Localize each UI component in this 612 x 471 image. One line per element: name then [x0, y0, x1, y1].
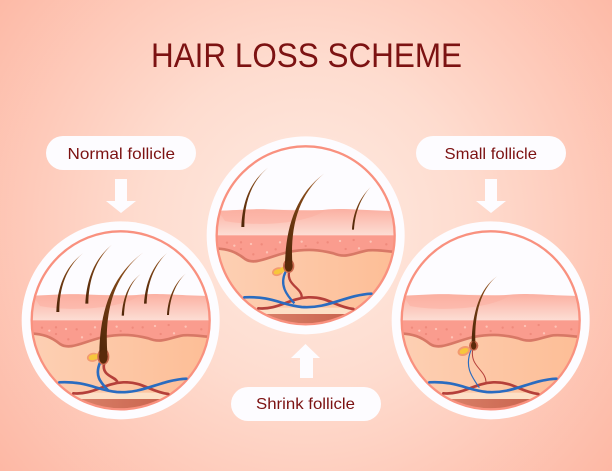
label: normal follicle [46, 136, 196, 170]
thin hair with follicle [469, 276, 497, 351]
label: small follicle [416, 136, 566, 170]
sebaceous gland [87, 352, 101, 362]
blood vessels [244, 272, 371, 309]
label: small follicle: Small follicle [444, 146, 537, 163]
arrow: small follicle down [476, 179, 506, 213]
sebaceous gland [457, 345, 471, 357]
arrow: shrink follicle up [291, 344, 320, 378]
arrow: normal follicle down [106, 179, 136, 213]
sebaceous gland [272, 265, 286, 277]
panel: small follicle cross-section [392, 221, 590, 419]
title: HAIR LOSS SCHEME [151, 37, 462, 75]
panel: shrink follicle cross-section [207, 136, 405, 334]
label: shrink follicle: Shrink follicle [256, 396, 355, 413]
main hair with follicle [283, 173, 324, 273]
blood vessels [429, 349, 556, 394]
blood vessels [59, 363, 186, 394]
label: shrink follicle [231, 387, 381, 421]
short hairs [241, 167, 371, 230]
main hair with follicle [97, 252, 143, 365]
short hairs [56, 245, 186, 316]
label: normal follicle: Normal follicle [68, 146, 175, 163]
panel: normal follicle cross-section [22, 221, 220, 419]
